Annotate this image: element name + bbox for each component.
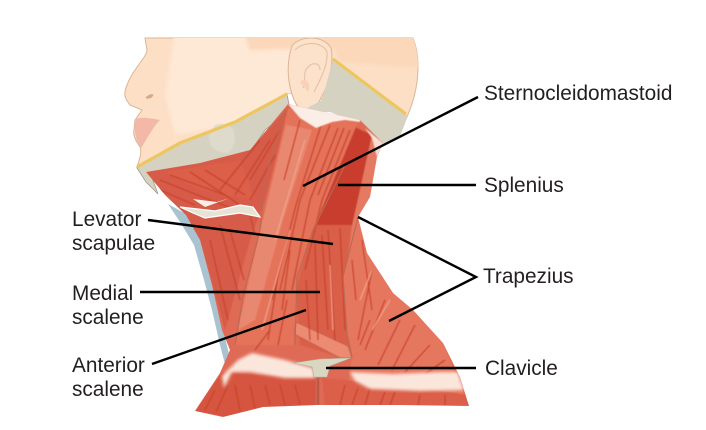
- label: Trapezius: Trapezius: [483, 265, 574, 288]
- nostril: [146, 94, 153, 99]
- scalene region: [296, 225, 352, 360]
- leader line: Anterior scalene: [152, 310, 306, 364]
- head skin: [125, 30, 425, 167]
- illustration: [125, 30, 480, 420]
- neck muscle anatomy diagram: [72, 38, 672, 417]
- pale tendon band left: [222, 353, 315, 388]
- ear: [288, 38, 332, 110]
- light streaks: [262, 140, 390, 330]
- label: Levator scapulae: scapulae: [72, 232, 155, 255]
- upper front muscles: [146, 105, 290, 330]
- lips: [135, 118, 160, 148]
- label: Levator scapulae: Levator: [72, 208, 141, 231]
- label: Anterior scalene: Anterior: [72, 354, 145, 377]
- label: Clavicle: Clavicle: [485, 357, 558, 380]
- blue fascia edge: [168, 204, 230, 368]
- yellow fat strips: [137, 59, 406, 167]
- levator outer strip: [349, 138, 378, 249]
- lower chest muscle: [195, 372, 316, 417]
- sternocleidomastoid: [235, 108, 358, 345]
- grey connective tissue: [137, 59, 408, 194]
- leader line: Clavicle: [326, 367, 476, 369]
- muscle mass: [130, 100, 480, 420]
- clavicle bone: [293, 358, 351, 377]
- trapezius: [344, 224, 464, 394]
- leader line: Medial scalene: [140, 291, 320, 293]
- leader lines: Trapezius: [358, 217, 476, 321]
- pale tendon at mastoid: [288, 104, 360, 128]
- muscle outlines: [235, 110, 358, 357]
- label: Anterior scalene: scalene: [72, 378, 144, 401]
- splenius dark muscle: [316, 128, 372, 226]
- clavicular band: [294, 322, 352, 358]
- leader line: Levator scapulae: [148, 220, 333, 244]
- label: Medial scalene: scalene: [72, 306, 144, 329]
- leader line: Splenius: [338, 184, 476, 186]
- label: Medial scalene: Medial: [72, 282, 133, 305]
- label: Sternocleidomastoid: Sternocleidomastoid: [484, 82, 672, 105]
- label: Splenius: Splenius: [484, 174, 564, 197]
- pale tendon band right: [350, 372, 464, 391]
- hyoid bone: [180, 198, 260, 218]
- muscle fibres: [160, 120, 445, 412]
- leader line: Sternocleidomastoid: [303, 97, 478, 186]
